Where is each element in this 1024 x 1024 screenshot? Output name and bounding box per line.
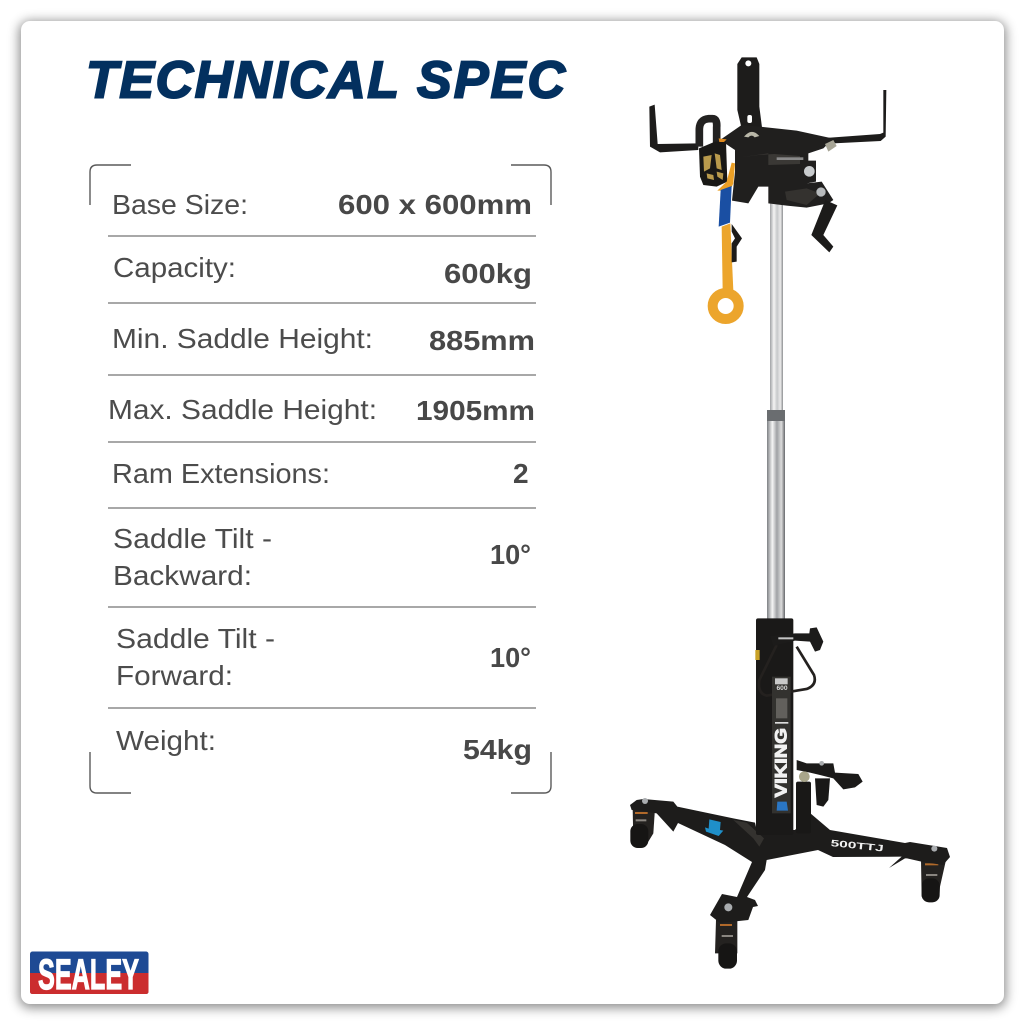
blue leg ship logo: [705, 819, 723, 836]
lift base: [630, 618, 950, 969]
row: saddle tilt backward: Backward:: [113, 560, 252, 591]
lower left crank handle: [732, 224, 742, 262]
Sealey logo: SEALEY: [38, 951, 139, 999]
row: base size: Base Size:: [112, 189, 248, 220]
row: weight: Weight:: [116, 725, 216, 756]
row: ram extensions: [112, 458, 529, 489]
row: saddle tilt forward: Forward:: [116, 660, 233, 691]
foot pedal assembly: [796, 760, 863, 833]
row: saddle tilt backward: 10°: [490, 539, 531, 570]
title: TECHNICAL: [86, 52, 399, 110]
row: min saddle height: 885mm: [429, 325, 535, 356]
row: saddle tilt backward: Saddle Tilt -: [113, 523, 272, 554]
row: max saddle height: [108, 394, 535, 426]
frame corner brackets: [90, 165, 551, 793]
ratchet handle: [699, 119, 717, 147]
saddle plate and head body: [720, 125, 833, 208]
lift base: 600: [776, 685, 788, 692]
leg bolts: [642, 761, 937, 911]
Viking logo on cylinder: VIKING: [772, 728, 791, 797]
row: min saddle height: [112, 323, 535, 356]
row: saddle tilt forward: [116, 623, 531, 691]
saddle right arm: [820, 90, 886, 143]
row: ram extensions: 2: [513, 458, 529, 489]
row: base size: [112, 189, 532, 220]
row: capacity: Capacity:: [113, 252, 236, 283]
model number: 500TTJ: [830, 838, 884, 854]
strap: coiled loop: [713, 293, 739, 319]
row: capacity: 600kg: [444, 258, 532, 289]
row: max saddle height: Max. Saddle Height:: [108, 394, 377, 425]
row: weight: 54kg: [463, 734, 532, 765]
saddle rear tab: [737, 57, 762, 129]
strap: orange upper: [717, 163, 735, 191]
row: min saddle height: Min. Saddle Height:: [112, 323, 373, 354]
strap: orange lower: [722, 223, 733, 291]
base frame and legs: [630, 799, 950, 923]
row: weight: [116, 725, 532, 765]
telescopic ram: [767, 200, 785, 622]
row: saddle tilt backward: [113, 523, 531, 591]
title: [86, 52, 566, 110]
row dividers: [108, 236, 536, 708]
product: transmission jack: [630, 57, 950, 969]
Sealey logo: [30, 951, 148, 999]
pump handle: [755, 627, 823, 696]
saddle left arm: [649, 105, 698, 152]
title: SPEC: [417, 52, 566, 110]
castor forks: [633, 808, 946, 953]
castor wheels: [630, 824, 940, 969]
strap: blue section: [719, 186, 732, 227]
ship logo on label: [777, 802, 788, 811]
ratchet buckle: [699, 142, 727, 187]
row: max saddle height: 1905mm: [416, 395, 535, 426]
panel: specification table: [90, 165, 551, 793]
row: saddle tilt forward: 10°: [490, 642, 531, 673]
warning label: [772, 677, 791, 813]
saddle head: [649, 57, 886, 319]
row: capacity: [113, 252, 532, 289]
row: base size: 600 x 600mm: [338, 189, 532, 220]
row: saddle tilt forward: Saddle Tilt -: [116, 623, 275, 654]
right crank handle: [811, 200, 837, 252]
row: ram extensions: Ram Extensions:: [112, 458, 330, 489]
main cylinder: [756, 618, 793, 835]
